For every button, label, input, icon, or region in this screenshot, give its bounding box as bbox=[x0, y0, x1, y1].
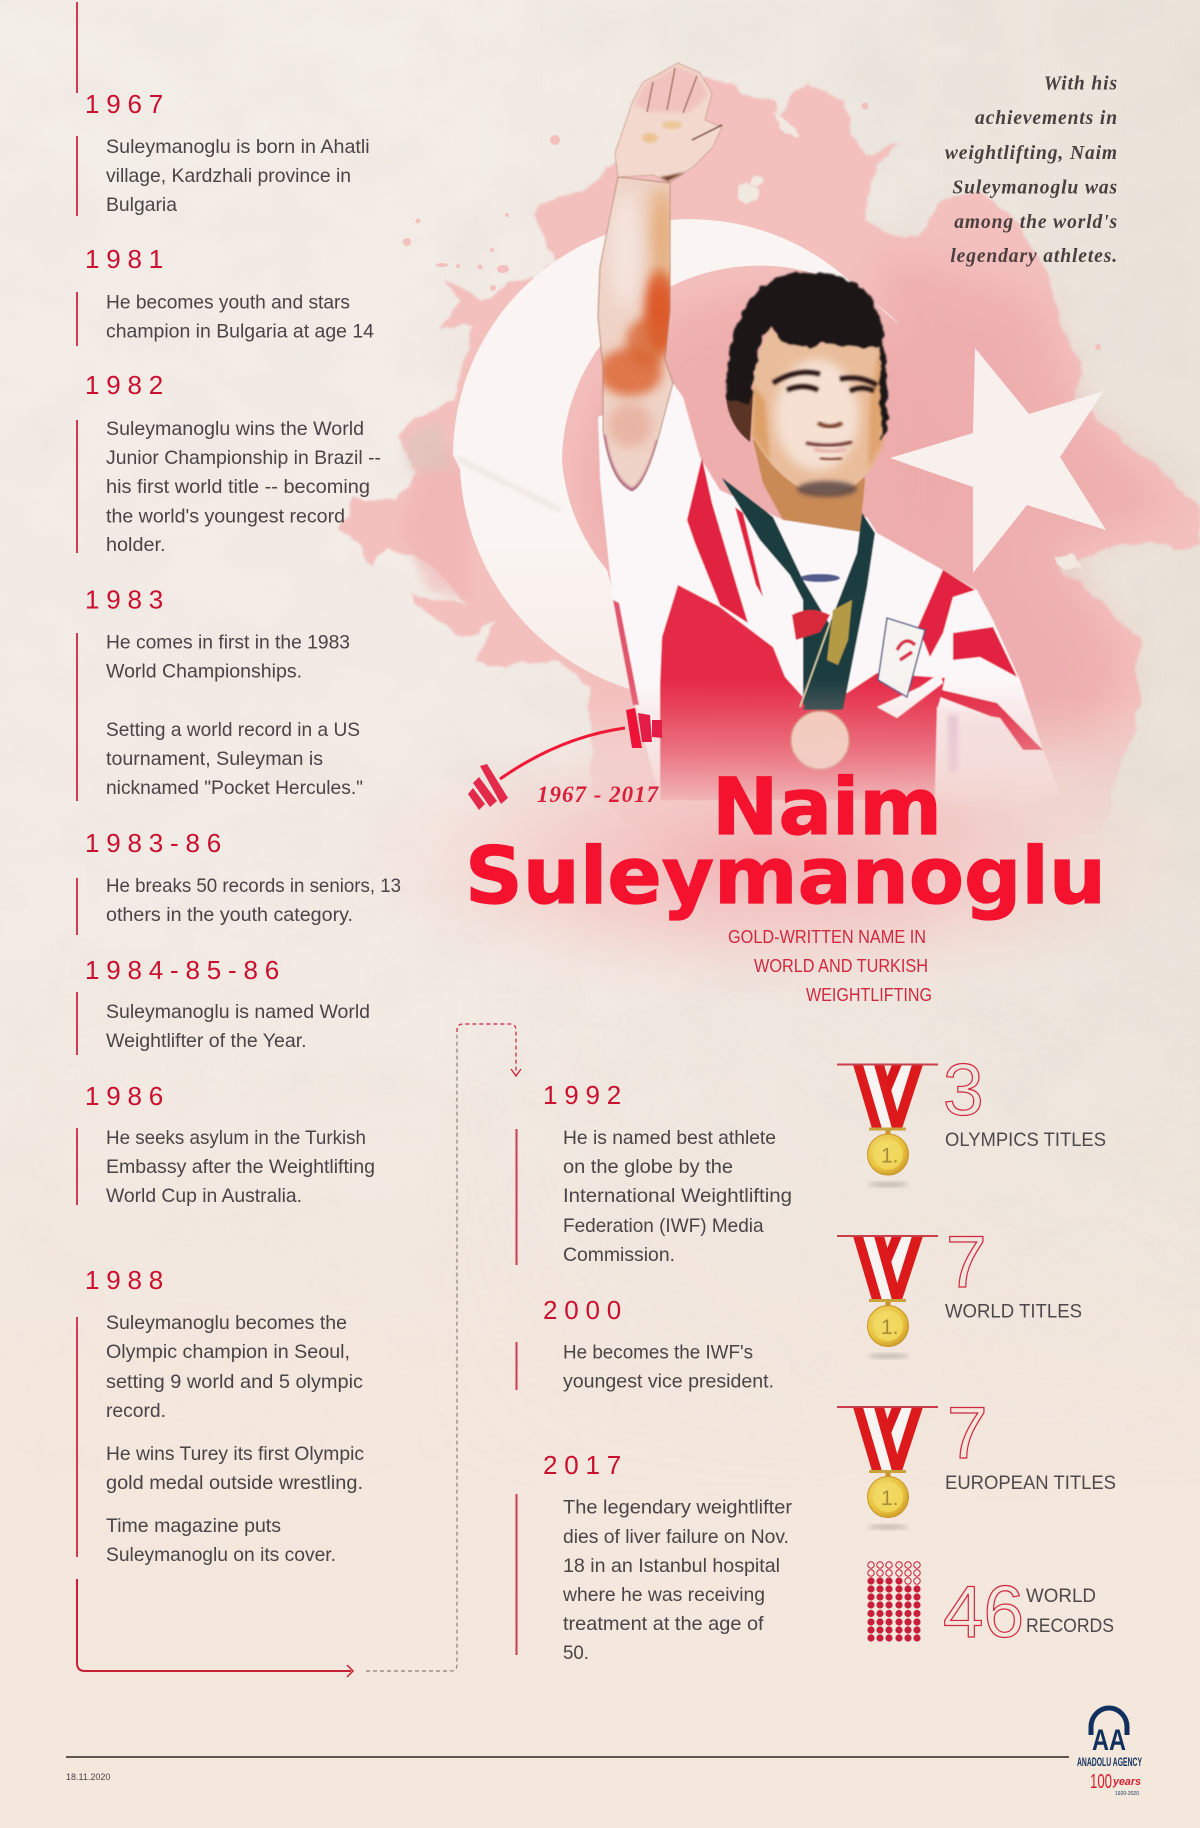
timeline entry: 1982: his first world title -- becoming bbox=[106, 477, 370, 498]
quote: achievements in bbox=[975, 108, 1118, 129]
timeline entry: 1981: champion in Bulgaria at age 14 bbox=[106, 322, 374, 342]
stat: 3 Olympics titles: OLYMPICS TITLES bbox=[945, 1129, 1106, 1151]
timeline entry: 2017: 18 in an Istanbul hospital bbox=[563, 1556, 780, 1577]
timeline entry: 1988: gold medal outside wrestling. bbox=[106, 1473, 363, 1494]
timeline entry: 1992: on the globe by the bbox=[563, 1157, 733, 1178]
timeline entry: 1988 bbox=[77, 1265, 364, 1566]
timeline entry: 1986: Embassy after the Weightlifting bbox=[106, 1157, 375, 1178]
logo: Anadolu Agency: ANADOLU AGENCY bbox=[1077, 1755, 1142, 1769]
timeline entry: 1984-85-86: 1984-85-86 bbox=[85, 955, 286, 985]
timeline entry: 1992: He is named best athlete bbox=[563, 1128, 776, 1149]
timeline entry: 1982: Suleymanoglu wins the World bbox=[106, 419, 364, 440]
timeline entry: 1983: He comes in first in the 1983 bbox=[106, 632, 350, 654]
logo: Anadolu Agency: years bbox=[1112, 1776, 1141, 1788]
timeline entry: 1983-86: others in the youth category. bbox=[106, 905, 353, 926]
title: Suleymanoglu bbox=[465, 832, 1106, 922]
timeline entry: 1983-86 bbox=[77, 828, 401, 935]
timeline entry: 1988: 1988 bbox=[85, 1265, 170, 1295]
ear bbox=[726, 395, 753, 442]
timeline entry: 1983: 1983 bbox=[85, 584, 170, 614]
stat: 7 european titles: EUROPEAN TITLES bbox=[945, 1472, 1116, 1494]
subtitle: GOLD-WRITTEN NAME IN bbox=[728, 927, 926, 947]
timeline entry: 1986 bbox=[77, 1081, 375, 1207]
timeline entry: 1983-86: 1983-86 bbox=[85, 828, 228, 858]
timeline entry: 1984-85-86: Suleymanoglu is named World bbox=[106, 1002, 370, 1023]
sleeve badge bbox=[878, 618, 925, 697]
dot grid bbox=[867, 1562, 921, 1642]
timeline entry: 1982 bbox=[77, 370, 381, 556]
timeline entry: 1967: Suleymanoglu is born in Ahatli bbox=[106, 137, 370, 158]
timeline entry: 1983-86: He breaks 50 records in seniors, 13 bbox=[106, 876, 401, 897]
timeline entry: 1983: nicknamed "Pocket Hercules." bbox=[106, 778, 363, 799]
face bbox=[752, 327, 884, 493]
timeline entry: 1988: Olympic champion in Seoul, bbox=[106, 1342, 350, 1363]
timeline entry: 1981 bbox=[77, 244, 374, 346]
timeline entry: 1984-85-86: Weightlifter of the Year. bbox=[106, 1031, 307, 1052]
timeline entry: 1982: holder. bbox=[106, 535, 166, 556]
footer rule bbox=[66, 1756, 1069, 1758]
quote: With his bbox=[1044, 74, 1118, 94]
timeline entry: 1984-85-86 bbox=[77, 955, 370, 1055]
timeline entry: 1988: record. bbox=[106, 1401, 166, 1422]
hair bbox=[727, 272, 887, 440]
stat: 7 world titles bbox=[837, 1222, 1082, 1358]
stat: 3 Olympics titles bbox=[837, 1050, 1106, 1187]
ribbon of medal bbox=[722, 478, 875, 710]
timeline entry: 1988: Suleymanoglu becomes the bbox=[106, 1313, 347, 1334]
timeline entry: 2017 bbox=[516, 1450, 793, 1664]
timeline entry: 1983 bbox=[77, 584, 363, 801]
logo: Anadolu Agency: 100 bbox=[1090, 1771, 1112, 1793]
subtitle bbox=[728, 927, 932, 1005]
subtitle: WORLD AND TURKISH bbox=[754, 956, 928, 976]
timeline entry: 1982: the world's youngest record bbox=[106, 506, 345, 528]
stat: 7 european titles bbox=[837, 1393, 1116, 1530]
neck bbox=[753, 440, 865, 532]
pink map splash bbox=[320, 63, 1200, 1010]
collar bbox=[783, 520, 860, 600]
title glow bbox=[320, 710, 1200, 1010]
timeline entry: 1988: Suleymanoglu on its cover. bbox=[106, 1545, 336, 1566]
stat: 46 world records: RECORDS bbox=[1026, 1615, 1114, 1637]
medal bbox=[791, 711, 849, 769]
timeline entry: 1992: 1992 bbox=[543, 1080, 628, 1110]
timeline entry: 1967: village, Kardzhali province in bbox=[106, 166, 351, 187]
title bbox=[465, 763, 1106, 922]
white star bbox=[890, 348, 1106, 573]
lifespan dates: 1967 - 2017 bbox=[537, 782, 660, 807]
timeline entry: 1981: He becomes youth and stars bbox=[106, 292, 350, 314]
stat: 7 european titles: 7 bbox=[947, 1393, 988, 1474]
quote: Suleymanoglu was bbox=[952, 178, 1118, 199]
paper holes and splatter bbox=[736, 112, 1082, 570]
shirt white band bbox=[877, 673, 943, 718]
lower sleeve bbox=[936, 706, 1022, 748]
stat: 7 world titles: 7 bbox=[946, 1222, 987, 1303]
timeline entry: 2000 bbox=[516, 1295, 774, 1393]
timeline entry: 1992: Commission. bbox=[563, 1245, 675, 1266]
timeline entry: 1967: Bulgaria bbox=[106, 195, 177, 216]
timeline entry: 1992: Federation (IWF) Media bbox=[563, 1216, 764, 1237]
timeline entry: 1967: 1967 bbox=[85, 89, 170, 119]
timeline entry: 2017: 2017 bbox=[543, 1450, 628, 1480]
white shirt bbox=[598, 383, 1060, 800]
white crescent bbox=[453, 219, 900, 692]
timeline entry: 2017: where he was receiving bbox=[562, 1585, 765, 1606]
nose and mouth bbox=[818, 423, 842, 426]
timeline entry: 1992 bbox=[516, 1080, 792, 1266]
arrow: timeline connector bbox=[77, 1024, 521, 1677]
timeline entry: 1988: He wins Turey its first Olympic bbox=[106, 1444, 364, 1465]
raised arm and hand bbox=[598, 63, 722, 491]
timeline entry: 1983: Setting a world record in a US bbox=[106, 720, 360, 741]
red panel bbox=[660, 585, 945, 800]
shoulder stripes bbox=[687, 458, 748, 623]
timeline entry: 1982: Junior Championship in Brazil -- bbox=[106, 448, 381, 469]
timeline entry: 2017: dies of liver failure on Nov. bbox=[563, 1527, 789, 1548]
timeline entry: 1983: World Championships. bbox=[106, 662, 302, 683]
quote bbox=[945, 74, 1118, 267]
logo: Anadolu Agency bbox=[1077, 1708, 1142, 1797]
title: Naim bbox=[712, 763, 942, 853]
icon: barbell arc bbox=[468, 708, 662, 810]
athlete bbox=[598, 63, 1060, 813]
stat: 46 world records: 46 bbox=[943, 1572, 1024, 1653]
timeline entry: 1986: He seeks asylum in the Turkish bbox=[106, 1128, 366, 1149]
timeline entry: 1986: 1986 bbox=[85, 1081, 170, 1111]
quote: weightlifting, Naim bbox=[945, 143, 1118, 164]
timeline entry: 2017: 50. bbox=[563, 1643, 589, 1664]
timeline entry: 1992: International Weightlifting bbox=[563, 1186, 792, 1207]
top timeline stem bbox=[76, 2, 78, 93]
timeline entry: 1988: Time magazine puts bbox=[106, 1516, 281, 1537]
timeline entry: 2000: He becomes the IWF's bbox=[563, 1342, 753, 1364]
timeline entry: 1981: 1981 bbox=[85, 244, 170, 274]
date: 18.11.2020 bbox=[66, 1772, 110, 1782]
logo: Anadolu Agency: 1920-2020 bbox=[1115, 1791, 1139, 1797]
stat: 46 world records bbox=[867, 1562, 1114, 1653]
timeline entry: 1967 bbox=[77, 89, 370, 216]
timeline entry: 2000: youngest vice president. bbox=[563, 1372, 774, 1393]
timeline entry: 1988: setting 9 world and 5 olympic bbox=[106, 1372, 363, 1393]
stat: 7 world titles: WORLD TITLES bbox=[945, 1300, 1082, 1322]
logo: Anadolu Agency: AA bbox=[1092, 1724, 1126, 1757]
subtitle: WEIGHTLIFTING bbox=[806, 985, 932, 1005]
quote: among the world's bbox=[954, 212, 1118, 233]
timeline entry: 1983: tournament, Suleyman is bbox=[106, 749, 323, 770]
timeline entry: 1982: 1982 bbox=[85, 370, 170, 400]
timeline entry: 1986: World Cup in Australia. bbox=[106, 1186, 302, 1207]
timeline entry: 2017: treatment at the age of bbox=[563, 1614, 764, 1635]
quote: legendary athletes. bbox=[950, 246, 1118, 267]
timeline entry: 2017: The legendary weightlifter bbox=[563, 1498, 793, 1519]
eyebrows and eyes bbox=[773, 372, 877, 391]
stat: 46 world records: WORLD bbox=[1026, 1585, 1096, 1607]
stat: 3 Olympics titles: 3 bbox=[943, 1050, 984, 1131]
sleeve stripes bbox=[918, 570, 1043, 750]
timeline entry: 2000: 2000 bbox=[543, 1295, 628, 1325]
